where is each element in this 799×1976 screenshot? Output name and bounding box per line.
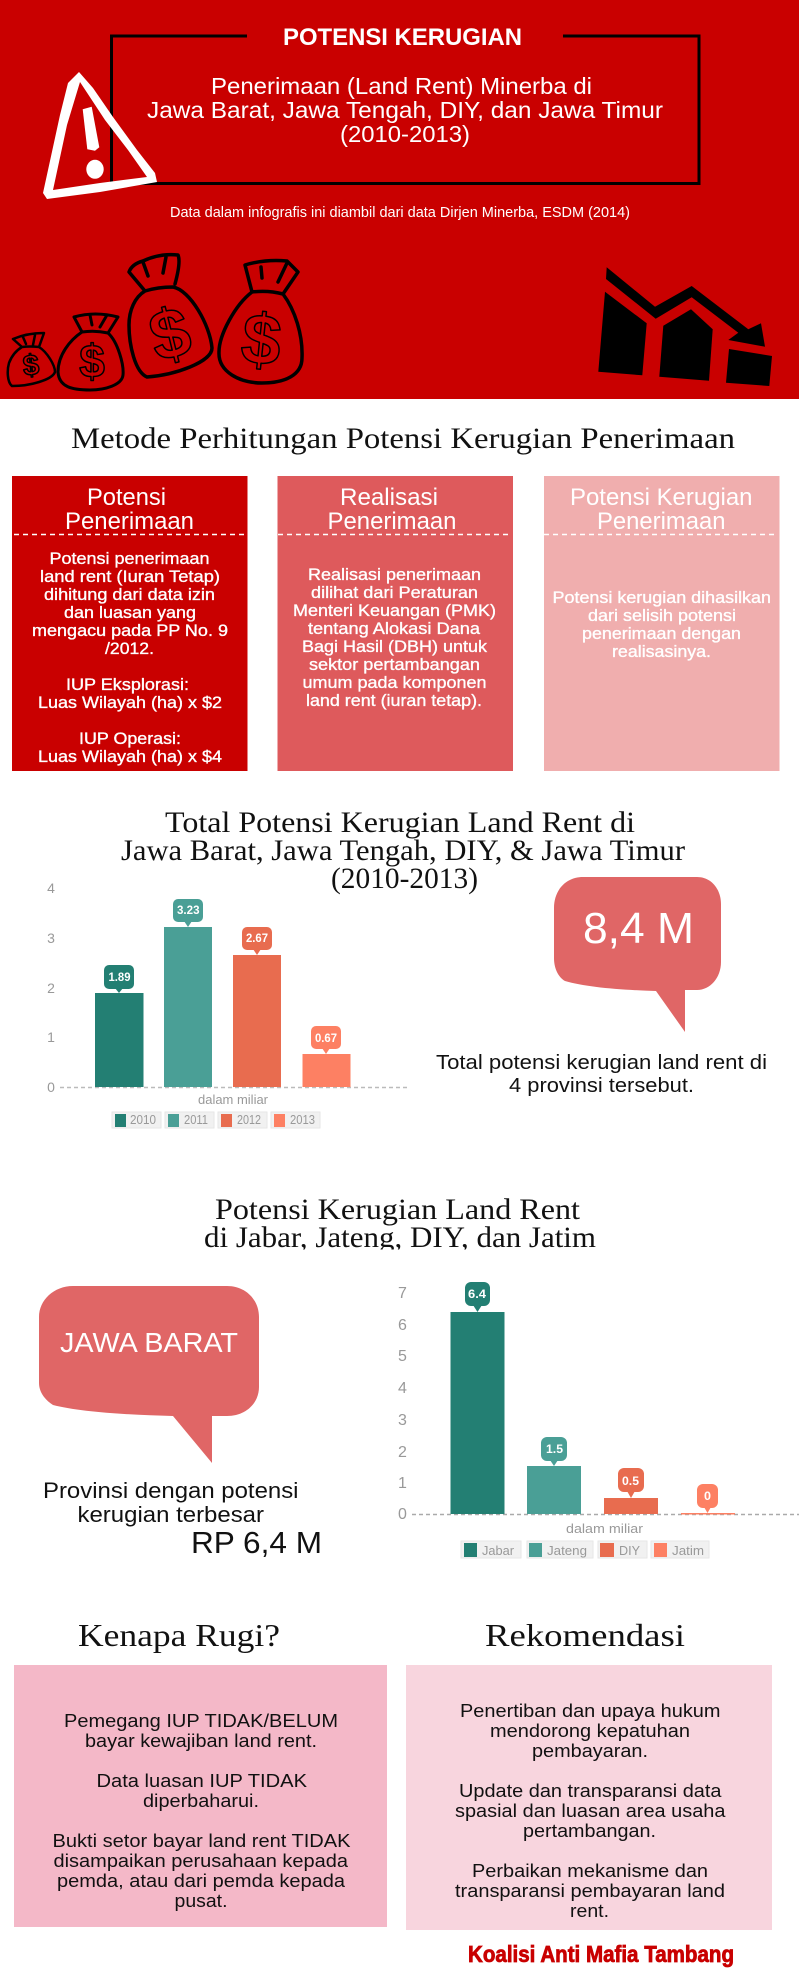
text: provinsi terbesar: Provinsi dengan potensi: [43, 1478, 298, 1503]
panel: potensi penerimaan: dan luasan yang: [64, 603, 196, 622]
panel: realisasi penerimaan: Penerimaan: [328, 508, 456, 535]
text: provinsi terbesar: kerugian terbesar: [78, 1502, 264, 1527]
bar chart: kerugian per provinsi: 0: [398, 1506, 407, 1523]
panel: potensi kerugian penerimaan: Potensi Kerugian: [570, 484, 752, 511]
text: total caption: [436, 1052, 767, 1097]
bar chart: kerugian per tahun: 1: [47, 1029, 55, 1045]
panel: potensi penerimaan: Luas Wilayah (ha) x $2: [38, 693, 222, 712]
footer credit: Koalisi Anti Mafia Tambang: [468, 1941, 734, 1967]
legend: [112, 1112, 320, 1128]
panel: potensi penerimaan: Potensi penerimaan: [50, 549, 210, 568]
legend: 2010: [130, 1112, 156, 1127]
panel: rekomendasi: [406, 1665, 772, 1930]
bar chart: kerugian per provinsi: [398, 1282, 799, 1558]
panel: potensi penerimaan: [12, 476, 248, 771]
panel: rekomendasi: pembayaran.: [532, 1741, 648, 1761]
legend: [461, 1541, 709, 1558]
bar 2012: [233, 927, 281, 1087]
icon: money bags: [8, 255, 302, 390]
bar jabar: 6.4: [468, 1287, 486, 1301]
callout: jawa barat: JAWA BARAT: [60, 1327, 238, 1358]
panel: potensi penerimaan: IUP Eksplorasi:: [66, 675, 189, 694]
heading: total potensi kerugian: [121, 806, 685, 895]
panel: potensi penerimaan: dihitung dari data izin: [44, 585, 215, 604]
panel: potensi penerimaan: IUP Operasi:: [79, 729, 181, 748]
bar diy: [604, 1468, 658, 1514]
panel: kenapa rugi: Pemegang IUP TIDAK/BELUM: [64, 1711, 338, 1731]
panel: kenapa rugi: diperbaharui.: [143, 1791, 259, 1811]
panel: realisasi penerimaan: dilihat dari Peraturan: [311, 583, 478, 602]
panel: potensi kerugian penerimaan: penerimaan dengan: [582, 624, 741, 643]
bag small: [8, 333, 55, 386]
heading: total potensi kerugian: (2010-2013): [331, 862, 478, 895]
heading: potensi per provinsi: Potensi Kerugian Land Rent: [215, 1193, 581, 1226]
bag small: $: [22, 349, 40, 383]
bar jatim: [681, 1484, 735, 1514]
panel: potensi penerimaan: land rent (Iuran Tetap): [40, 567, 220, 586]
bar 2012: 2.67: [246, 931, 268, 945]
panel: realisasi penerimaan: tentang Alokasi Dana: [308, 619, 481, 638]
panel: potensi kerugian penerimaan: realisasinya.: [612, 642, 711, 661]
bar chart: kerugian per provinsi: 5: [398, 1348, 407, 1365]
bar 2013: [302, 1026, 350, 1087]
bar chart: kerugian per provinsi: 6: [398, 1317, 407, 1334]
panel: realisasi penerimaan: Bagi Hasil (DBH) untuk: [302, 637, 488, 656]
heading: kenapa rugi: Kenapa Rugi?: [78, 1617, 280, 1653]
panel: realisasi penerimaan: land rent (iuran tetap).: [306, 691, 482, 710]
bar 2013: 0.67: [315, 1031, 337, 1045]
legend: 2012: [237, 1112, 261, 1127]
panel: kenapa rugi: [14, 1665, 387, 1927]
legend: Jateng: [547, 1543, 587, 1558]
panel: rekomendasi: mendorong kepatuhan: [490, 1721, 690, 1741]
panel: rekomendasi: Penertiban dan upaya hukum: [460, 1701, 720, 1721]
text: total caption: Total potensi kerugian land rent di: [436, 1052, 767, 1074]
panel: rekomendasi: pertambangan.: [523, 1821, 656, 1841]
bar diy: 0.5: [622, 1474, 639, 1488]
panel: realisasi penerimaan: Menteri Keuangan (PMK): [293, 601, 496, 620]
bar chart: kerugian per provinsi: 7: [398, 1285, 407, 1302]
axis caption: dalam miliar: [566, 1521, 644, 1536]
panel: realisasi penerimaan: [278, 476, 513, 771]
legend: DIY: [619, 1543, 640, 1558]
bag medium: $: [79, 335, 105, 387]
callout: 8,4 M: 8,4 M: [583, 904, 694, 953]
panel: rekomendasi: Update dan transparansi data: [459, 1781, 723, 1801]
heading: rekomendasi: Rekomendasi: [485, 1617, 685, 1653]
subtitle: Jawa Barat, Jawa Tengah, DIY, dan Jawa Timur: [147, 97, 663, 123]
subtitle: (2010-2013): [340, 121, 470, 147]
heading: potensi per provinsi: [190, 1193, 610, 1262]
bar chart: kerugian per provinsi: 4: [398, 1380, 407, 1397]
icon: warning triangle: [43, 72, 157, 199]
panel: rekomendasi: rent.: [570, 1901, 609, 1921]
panel: potensi kerugian penerimaan: Potensi kerugian dihasilkan: [552, 588, 771, 607]
panel: realisasi penerimaan: Realisasi: [340, 484, 438, 511]
panel: potensi kerugian penerimaan: dari selisih potensi: [588, 606, 736, 625]
bar 2011: [164, 899, 212, 1087]
panel: rekomendasi: transparansi pembayaran land: [455, 1881, 725, 1901]
legend: Jabar: [482, 1543, 515, 1558]
bar chart: kerugian per tahun: 2: [47, 980, 55, 996]
callout: 8,4 M: [554, 877, 721, 1032]
panel: potensi kerugian penerimaan: [544, 476, 780, 771]
panel: rekomendasi: spasial dan luasan area usaha: [455, 1801, 727, 1821]
legend: 2011: [184, 1112, 208, 1127]
panel: potensi penerimaan: Potensi: [87, 484, 166, 511]
legend: Jatim: [672, 1543, 704, 1558]
panel: realisasi penerimaan: Realisasi penerimaan: [308, 565, 481, 584]
panel: kenapa rugi: pusat.: [174, 1891, 228, 1911]
bar chart: kerugian per tahun: 4: [47, 880, 55, 896]
text: provinsi terbesar: [43, 1478, 322, 1560]
icon: falling chart: [598, 267, 772, 386]
title frame: [112, 36, 699, 184]
bag large left: [129, 255, 212, 377]
bag medium: [58, 314, 123, 390]
bar 2010: 1.89: [108, 970, 131, 984]
heading: total potensi kerugian: Total Potensi Kerugian Land Rent di: [165, 806, 635, 839]
bar jatim: 0: [704, 1489, 711, 1503]
bag large right: [219, 260, 302, 383]
bar chart: kerugian per tahun: 0: [47, 1079, 55, 1095]
text: provinsi terbesar: RP 6,4 M: [191, 1525, 322, 1560]
panel: kenapa rugi: bayar kewajiban land rent.: [85, 1731, 317, 1751]
axis caption: dalam miliar: [198, 1092, 269, 1107]
bar chart: kerugian per provinsi: 3: [398, 1412, 407, 1429]
panel: potensi penerimaan: mengacu pada PP No. 9: [32, 621, 228, 640]
bar 2010: [95, 965, 144, 1087]
panel: potensi kerugian penerimaan: Penerimaan: [597, 508, 726, 535]
text: total caption: 4 provinsi tersebut.: [509, 1075, 694, 1097]
subtitle: [147, 73, 663, 147]
subtitle: Penerimaan (Land Rent) Minerba di: [211, 73, 592, 99]
bar 2011: 3.23: [177, 903, 200, 917]
panel: rekomendasi: Perbaikan mekanisme dan: [472, 1861, 708, 1881]
bar jabar: [450, 1282, 504, 1514]
heading: metode: Metode Perhitungan Potensi Kerugian Penerimaan: [71, 422, 735, 455]
bar jateng: 1.5: [546, 1442, 563, 1456]
legend: 2013: [290, 1112, 315, 1127]
bar chart: kerugian per provinsi: 2: [398, 1444, 407, 1461]
source note: Data dalam infografis ini diambil dari data Dirjen Minerba, ESDM (2014): [170, 204, 630, 221]
panel: potensi penerimaan: Luas Wilayah (ha) x $4: [38, 747, 222, 766]
main title: POTENSI KERUGIAN: [283, 24, 522, 51]
bag large left: $: [142, 291, 198, 377]
heading: potensi per provinsi: di Jabar, Jateng, DIY, dan Jatim: [204, 1221, 596, 1254]
panel: kenapa rugi: disampaikan perusahaan kepada: [54, 1851, 349, 1871]
panel: kenapa rugi: Data luasan IUP TIDAK: [96, 1771, 307, 1791]
panel: potensi penerimaan: Penerimaan: [65, 508, 194, 535]
callout: jawa barat: [39, 1286, 259, 1463]
panel: realisasi penerimaan: sektor pertambangan: [309, 655, 480, 674]
bag large right: $: [238, 299, 285, 382]
panel: kenapa rugi: pemda, atau dari pemda kepada: [57, 1871, 346, 1891]
panel: potensi penerimaan: /2012.: [105, 639, 154, 658]
bar chart: kerugian per tahun: [47, 880, 407, 1128]
bar jateng: [527, 1437, 581, 1514]
bar chart: kerugian per tahun: 3: [47, 930, 55, 946]
panel: kenapa rugi: Bukti setor bayar land rent TIDAK: [52, 1831, 350, 1851]
panel: realisasi penerimaan: umum pada komponen: [302, 673, 486, 692]
bar chart: kerugian per provinsi: 1: [398, 1475, 407, 1492]
heading: total potensi kerugian: Jawa Barat, Jawa Tengah, DIY, & Jawa Timur: [121, 834, 685, 867]
header banner: [0, 0, 799, 399]
